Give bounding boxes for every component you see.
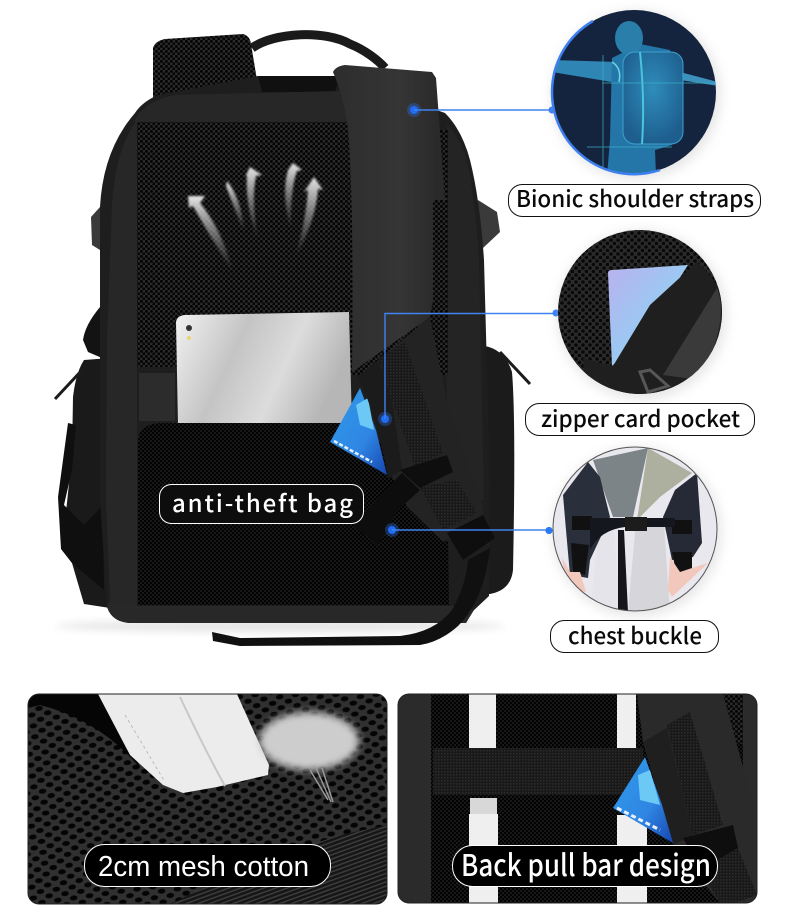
zippers bbox=[55, 352, 530, 399]
lower webbing bbox=[420, 480, 477, 530]
top flap bbox=[134, 91, 350, 122]
slider bbox=[683, 825, 738, 860]
strap bbox=[637, 694, 743, 902]
label: anti-theft bag: anti-theft bag bbox=[172, 484, 353, 519]
panel: back pull bar design bbox=[398, 694, 757, 903]
left side pocket bbox=[62, 358, 110, 608]
label: 2cm mesh cotton: 2cm mesh cotton bbox=[98, 851, 309, 883]
circle: bionic figure bbox=[550, 8, 720, 179]
left side strip bbox=[106, 120, 137, 606]
right side pocket bbox=[475, 346, 514, 594]
strap mesh edge lower bbox=[433, 200, 447, 373]
top handle bbox=[252, 35, 385, 68]
white strips bbox=[469, 694, 496, 748]
mesh top right bbox=[723, 694, 743, 744]
padded strap lower bbox=[360, 317, 483, 542]
side buckle left bbox=[91, 207, 100, 250]
top zipper zone bbox=[258, 76, 340, 92]
leather pocket edge bbox=[358, 360, 402, 478]
airflow arrows bbox=[188, 163, 323, 272]
strap webbing bbox=[378, 342, 443, 467]
card bbox=[613, 757, 673, 843]
cotton puff bbox=[259, 712, 359, 770]
side buckle right bbox=[478, 200, 500, 248]
shoulder strap upper bbox=[333, 65, 445, 372]
panel: 2cm mesh cotton bbox=[28, 694, 387, 904]
long strap tail bbox=[212, 548, 490, 646]
left bump bbox=[83, 307, 102, 358]
lower slider bbox=[447, 515, 495, 560]
bag body bbox=[100, 76, 490, 623]
pull bar bbox=[433, 748, 643, 795]
back web strip bbox=[139, 373, 175, 421]
left shoulder pad bbox=[153, 34, 259, 100]
label: zipper card pocket: zipper card pocket bbox=[541, 400, 740, 434]
circle: chest buckle photo bbox=[546, 445, 721, 616]
bank card bbox=[330, 388, 387, 475]
white fabric bbox=[98, 694, 269, 793]
upper mesh panel bbox=[137, 122, 352, 367]
label: chest buckle: chest buckle bbox=[568, 617, 702, 651]
callout line: card pocket bbox=[378, 310, 560, 426]
lower mesh pocket bbox=[138, 423, 449, 605]
callout line: chest buckle bbox=[385, 523, 552, 537]
ground shadow bbox=[55, 620, 505, 632]
callout line: shoulder strap bbox=[407, 103, 556, 117]
left side strap bbox=[58, 423, 104, 590]
bottom trim bbox=[107, 600, 474, 623]
chest buckle bbox=[353, 473, 420, 547]
tablet bbox=[176, 312, 352, 425]
backpack photo bbox=[55, 34, 530, 646]
upper slider bbox=[400, 455, 453, 488]
right side panel bbox=[447, 125, 484, 500]
label: back pull bar design: Back pull bar design bbox=[461, 841, 711, 885]
label: 2cm mesh cotton bbox=[84, 844, 330, 886]
label: bionic shoulder straps: Bionic shoulder straps bbox=[516, 180, 754, 214]
circle: card pocket bbox=[556, 228, 726, 399]
